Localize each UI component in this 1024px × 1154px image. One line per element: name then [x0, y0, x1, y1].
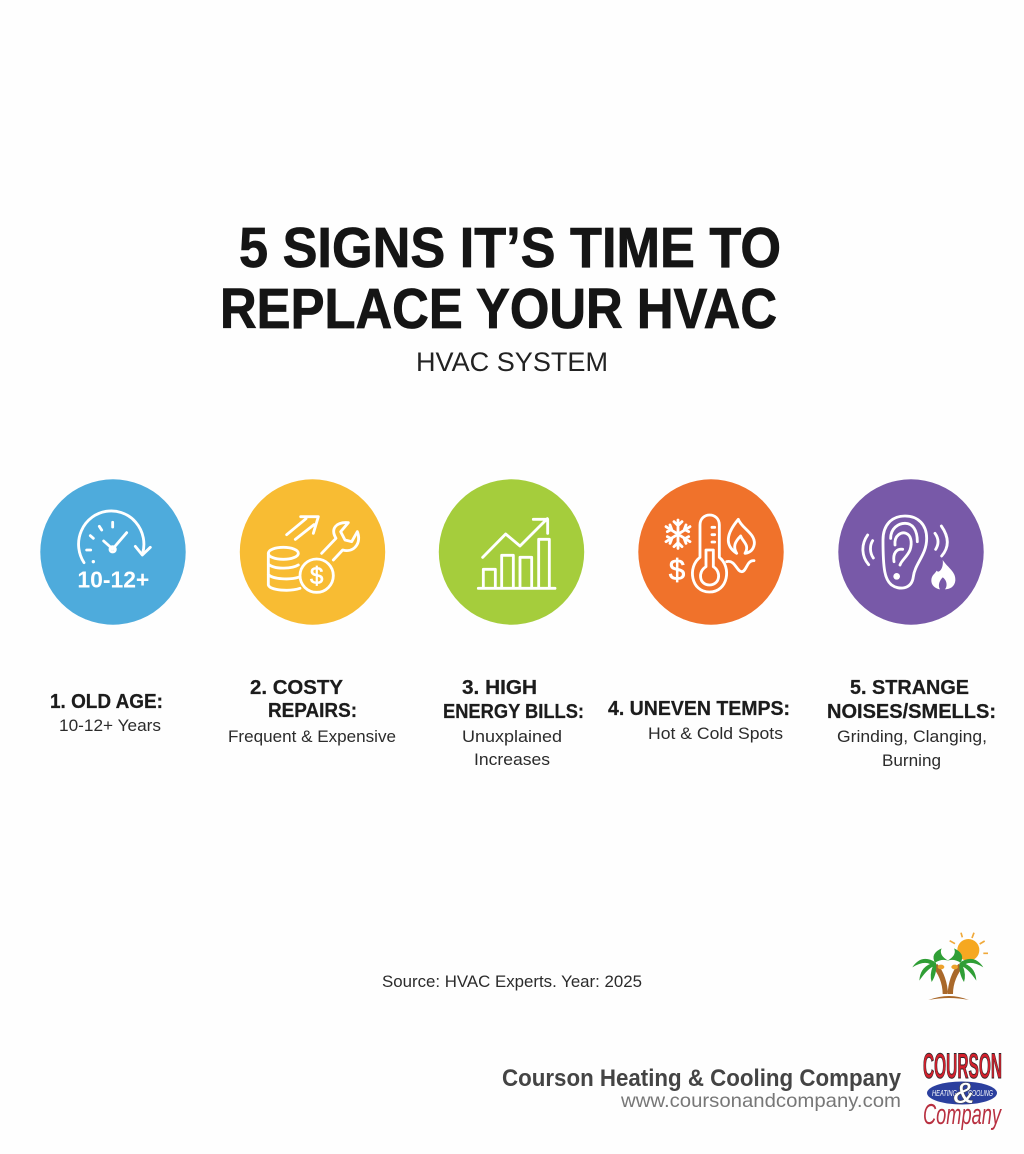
title: [220, 216, 781, 341]
label: costly repairs: [228, 677, 396, 746]
icon: uneven temps thermometer: [638, 479, 784, 625]
label: old age: 1. OLD AGE:: [50, 691, 163, 713]
source note: Source: HVAC Experts. Year: 2025: [382, 972, 642, 991]
label: high energy bills: Increases: [474, 750, 550, 769]
company logo: COOLING: [968, 1089, 993, 1098]
label: uneven temps: [608, 698, 790, 743]
label: uneven temps: 4. UNEVEN TEMPS:: [608, 698, 790, 720]
title: REPLACE YOUR HVAC: [220, 277, 777, 341]
label: high energy bills: [443, 677, 584, 769]
label: high energy bills: 3. HIGH: [462, 677, 537, 699]
label: costly repairs: REPAIRS:: [268, 700, 357, 722]
icon: old age clock: 10-12+: [77, 566, 149, 592]
icon: costly repairs coins and wrench: $: [310, 563, 323, 590]
company logo: HEATING: [932, 1089, 957, 1098]
icon: uneven temps thermometer: $: [669, 554, 685, 587]
icon: old age clock: [40, 479, 186, 625]
label: strange noises and smells: NOISES/SMELLS:: [827, 701, 996, 723]
label: old age: [50, 691, 163, 735]
icon: high energy bills chart: [439, 479, 584, 625]
label: high energy bills: ENERGY BILLS:: [443, 701, 584, 723]
subtitle: HVAC SYSTEM: [416, 347, 608, 377]
company name: Courson Heating & Cooling Company: [502, 1065, 902, 1092]
label: costly repairs: Frequent & Expensive: [228, 727, 396, 746]
icon: costly repairs coins and wrench: [240, 479, 385, 625]
title: 5 SIGNS IT’S TIME TO: [239, 216, 781, 280]
label: uneven temps: Hot & Cold Spots: [648, 724, 783, 743]
icon: strange noises ear: [838, 479, 984, 625]
label: old age: 10-12+ Years: [59, 716, 161, 735]
label: strange noises and smells: Grinding, Clanging,: [837, 727, 987, 746]
company logo: &: [953, 1077, 975, 1110]
label: strange noises and smells: Burning: [882, 751, 941, 770]
label: costly repairs: 2. COSTY: [250, 677, 344, 699]
company website: www.coursonandcompany.com: [620, 1090, 901, 1112]
icon: palm trees and sun logo: [912, 933, 988, 1000]
label: strange noises and smells: 5. STRANGE: [850, 677, 969, 699]
company logo: [923, 1047, 1002, 1131]
label: high energy bills: Unuxplained: [462, 727, 562, 746]
label: strange noises and smells: [827, 677, 996, 770]
